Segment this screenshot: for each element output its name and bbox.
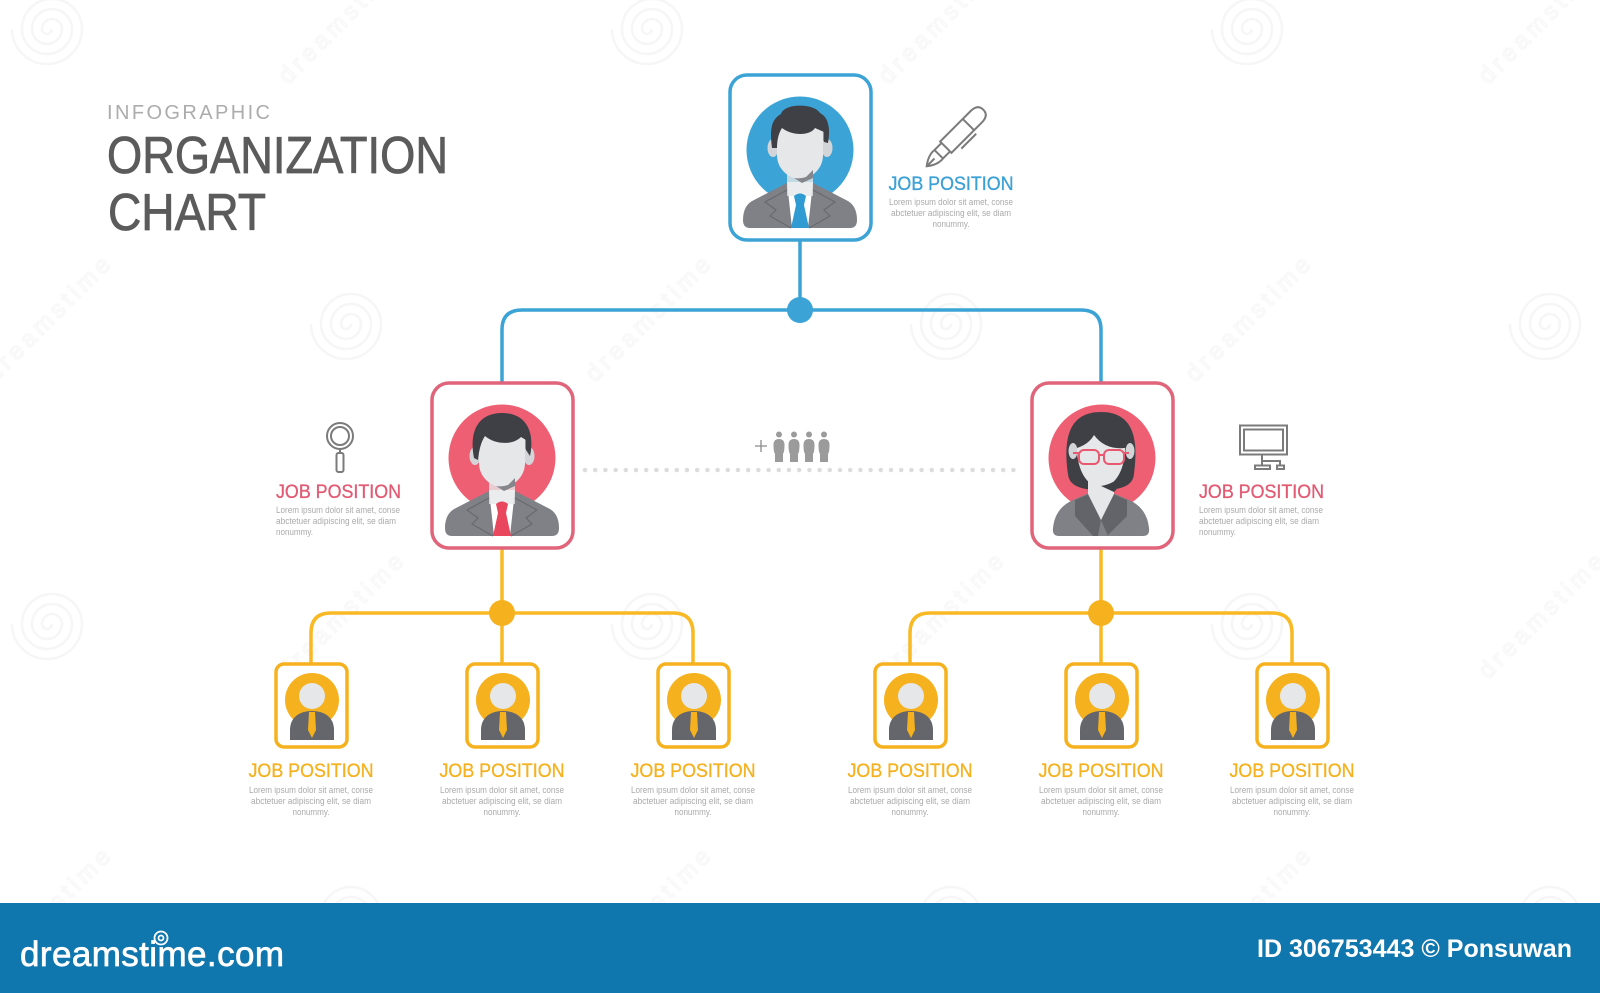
label: left manager job position: JOB POSITION — [276, 481, 401, 503]
heading: organization chart: ORGANIZATION — [107, 127, 448, 185]
text: dreamstime — [580, 251, 716, 387]
card: staff 1 — [276, 664, 347, 747]
label: staff 6 — [1230, 760, 1354, 817]
label: right manager job position: nonummy. — [1199, 527, 1236, 537]
connector lines: yellow right branch — [910, 548, 1292, 664]
label: top manager job position: abctetuer adipiscing elit, se diam — [891, 208, 1011, 218]
label: staff 6: Lorem ipsum dolor sit amet, conse — [1230, 785, 1354, 795]
label: staff 4: Lorem ipsum dolor sit amet, conse — [848, 785, 972, 795]
label: right manager job position — [1199, 481, 1324, 537]
label: staff 4: JOB POSITION — [848, 760, 972, 782]
label: staff 2: JOB POSITION — [440, 760, 564, 782]
label: staff 5 — [1038, 760, 1164, 817]
heading: organization chart: CHART — [108, 184, 266, 242]
label: staff 1: Lorem ipsum dolor sit amet, conse — [249, 785, 373, 795]
label: staff 6: abctetuer adipiscing elit, se diam — [1232, 796, 1352, 806]
label: staff 1: abctetuer adipiscing elit, se diam — [251, 796, 371, 806]
label: staff 1 — [248, 760, 374, 817]
label: staff 2: abctetuer adipiscing elit, se diam — [442, 796, 562, 806]
label: top manager job position: JOB POSITION — [888, 173, 1014, 195]
footer credit: ID 306753443 © Ponsuwan — [1257, 935, 1572, 963]
icon: plus four people — [755, 432, 830, 462]
icon: computer monitor — [1240, 426, 1287, 469]
label: staff 5: abctetuer adipiscing elit, se diam — [1041, 796, 1161, 806]
card: top manager — [730, 75, 871, 240]
card: staff 4 — [875, 664, 946, 747]
label: staff 4: nonummy. — [892, 807, 928, 817]
label: right manager job position: JOB POSITION — [1199, 481, 1324, 503]
dotted link between managers — [585, 468, 1015, 472]
icon: magnifier — [327, 423, 353, 472]
label: staff 2 — [440, 760, 564, 817]
label: staff 6: nonummy. — [1274, 807, 1310, 817]
connector lines: blue top level — [502, 240, 1101, 385]
label: right manager job position: Lorem ipsum dolor sit amet, conse — [1199, 505, 1323, 515]
footer band — [0, 903, 1600, 993]
label: staff 3: JOB POSITION — [630, 760, 756, 782]
label: staff 6: JOB POSITION — [1230, 760, 1354, 782]
label: staff 3 — [630, 760, 756, 817]
label: staff 2: nonummy. — [484, 807, 520, 817]
card: left manager — [432, 383, 573, 548]
footer logo: dreamstime.com: dreamstime.com — [20, 935, 284, 974]
text: dreamstime — [1180, 843, 1316, 979]
label: top manager job position — [888, 173, 1014, 229]
text: dreamstime — [1180, 251, 1316, 387]
heading: organization chart — [107, 127, 448, 242]
card: staff 5 — [1066, 664, 1137, 747]
eyebrow: infographic: INFOGRAPHIC — [107, 102, 270, 124]
card: staff 2 — [467, 664, 538, 747]
label: staff 3: Lorem ipsum dolor sit amet, conse — [631, 785, 755, 795]
label: left manager job position — [276, 481, 401, 537]
label: left manager job position: abctetuer adipiscing elit, se diam — [276, 516, 396, 526]
label: staff 1: JOB POSITION — [248, 760, 374, 782]
text: dreamstime — [273, 548, 409, 684]
icon: pen — [921, 104, 992, 175]
card: staff 3 — [658, 664, 729, 747]
label: staff 2: Lorem ipsum dolor sit amet, conse — [440, 785, 564, 795]
label: staff 5: Lorem ipsum dolor sit amet, conse — [1039, 785, 1163, 795]
label: top manager job position: nonummy. — [932, 219, 970, 229]
card: right manager — [1032, 383, 1173, 548]
title block — [107, 102, 448, 242]
label: staff 3: nonummy. — [674, 807, 712, 817]
label: staff 3: abctetuer adipiscing elit, se diam — [633, 796, 753, 806]
label: staff 5: JOB POSITION — [1038, 760, 1164, 782]
text: dreamstime — [580, 843, 716, 979]
text: dreamstime — [873, 548, 1009, 684]
card: staff 6 — [1257, 664, 1328, 747]
label: staff 5: nonummy. — [1082, 807, 1120, 817]
label: staff 1: nonummy. — [292, 807, 330, 817]
label: top manager job position: Lorem ipsum dolor sit amet, conse — [889, 197, 1013, 207]
label: left manager job position: nonummy. — [276, 527, 313, 537]
label: left manager job position: Lorem ipsum dolor sit amet, conse — [276, 505, 400, 515]
label: staff 4: abctetuer adipiscing elit, se diam — [850, 796, 970, 806]
label: staff 4 — [848, 760, 972, 817]
connector lines: yellow left branch — [311, 548, 693, 664]
label: right manager job position: abctetuer adipiscing elit, se diam — [1199, 516, 1319, 526]
